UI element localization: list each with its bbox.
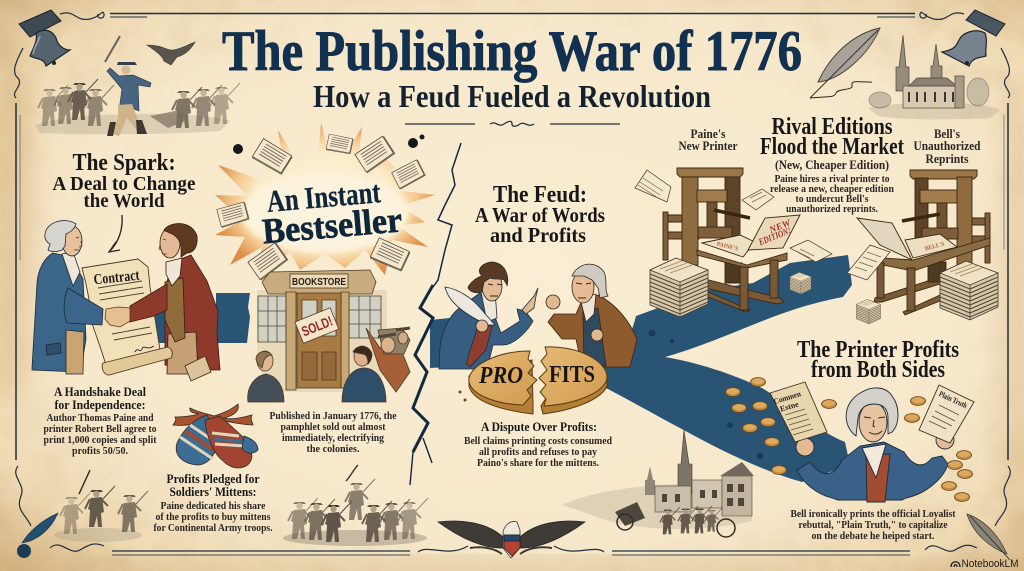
contract scroll: [82, 259, 172, 375]
text: bell ironically prints: rebuttal, "Plain Truth," to capitalize: [798, 519, 948, 531]
arm: paine sleeve: [130, 284, 167, 322]
illustration: paine's press: [650, 168, 811, 317]
text: published in january: Published in January 1776, the: [270, 410, 397, 422]
label: bell's unauthorized reprints: Unauthorized: [914, 139, 981, 153]
heading: the feud: and Profits: [490, 223, 586, 247]
text: published in january: immediately, electrifying: [282, 432, 385, 444]
heading: rival editions: (New, Cheaper Edition): [775, 157, 889, 172]
sketch: town top right: [868, 35, 1000, 119]
text: rival editions body: release a new, cheaper edition: [770, 184, 894, 195]
sketch: militia charge bottom: [283, 465, 428, 546]
text: rival editions body: unauthorized reprints.: [786, 204, 878, 215]
text: handshake deal: [44, 385, 157, 457]
text: published in january: [270, 410, 397, 455]
pamphlet: plain truth: Plain Truth: [938, 389, 969, 410]
icon: quill bottom right: [967, 514, 1010, 560]
heading: the spark: A Deal to Change: [52, 173, 196, 195]
text: handshake deal: printer Robert Bell agree to: [44, 424, 156, 435]
text: published in january: the colonies.: [306, 443, 360, 455]
loose sheets: [635, 170, 832, 262]
text: profits pledged: for Continental Army troops.: [154, 523, 273, 534]
text: profits pledged: Profits Pledged for: [166, 472, 260, 486]
heading: the feud: A War of Words: [475, 203, 605, 227]
icon: liberty bell left: [19, 10, 70, 66]
burst headline: Bestseller: [261, 199, 404, 251]
text: handshake deal: profits 50/50.: [72, 446, 128, 457]
text: profits pledged: of the profits to buy mittens: [156, 512, 270, 523]
figure: Bell shouting: [546, 264, 637, 367]
label: bell's unauthorized reprints: [914, 127, 981, 166]
illustration: paine and bell argue: [439, 262, 637, 369]
text: rival editions body: Paine hires a rival printer to: [774, 174, 890, 185]
title divider: [405, 121, 620, 126]
pamphlet: plain truth: [919, 385, 974, 443]
text: a dispute over profits: all profits and refuses to pay: [479, 447, 598, 458]
sketch: colonial town and cannon: [562, 430, 754, 537]
heading: the spark: The Spark:: [72, 150, 176, 176]
burst headline: [258, 173, 404, 251]
new edition frame: [748, 215, 800, 250]
icon: handshake: [105, 307, 130, 327]
right half: [541, 378, 607, 414]
heading: rival editions: Flood the Market: [760, 134, 904, 160]
icon: mittens: [173, 404, 258, 468]
coin word: FITS: [549, 362, 595, 388]
sketch: soldier bottom left: [54, 470, 148, 542]
customers: [248, 328, 410, 402]
bookstore sign: [290, 274, 348, 288]
heading: the printer profits: [797, 337, 959, 383]
text: bell ironically prints: [790, 508, 956, 542]
label: paine's new printer: New Printer: [678, 139, 738, 153]
label: paine's new printer: Paine's: [690, 127, 726, 141]
subtitle: How a Feud Fueled a Revolution: [313, 78, 711, 114]
text: bell ironically prints: Bell ironically prints the official Loyalist: [790, 508, 956, 520]
text: profits pledged: Soldiers' Mittens:: [170, 485, 256, 499]
heading: the feud: The Feud:: [493, 182, 587, 208]
heading: the spark: [52, 150, 196, 212]
loose printed page: [847, 245, 890, 280]
icon: eagle with shield: [438, 521, 585, 558]
icon: liberty bell right: [942, 10, 1005, 66]
sketch: quill top right: [810, 28, 880, 98]
figure: Robert Bell: [32, 221, 86, 374]
illustration: handshake with contract: [32, 221, 220, 381]
text: a dispute over profits: A Dispute Over Profits:: [481, 420, 597, 434]
arrow: spark to handshake: [109, 215, 122, 252]
contract scroll: Contract: [93, 268, 140, 288]
crack dividing the page: [410, 143, 461, 485]
ink river: right fork: [600, 255, 852, 482]
label: bell's unauthorized reprints: Bell's: [934, 127, 960, 141]
illustration: bell holding both pamphlets: [770, 382, 974, 502]
figure: Paine with quill: [439, 262, 538, 369]
text: handshake deal: Author Thomas Paine and: [46, 413, 154, 424]
text: handshake deal: print 1,000 copies and split: [44, 435, 157, 446]
icon: quill and inkwell bottom left: [17, 513, 58, 558]
book in hand: [185, 356, 211, 381]
text: rival editions body: [770, 174, 894, 215]
burst headline: An Instant: [265, 174, 382, 219]
pamphlet: common sense: [770, 382, 827, 442]
watermark: NotebookLM: NotebookLM: [962, 558, 1018, 570]
sketch: battle scene top left: [35, 36, 240, 136]
text: handshake deal: for Independence:: [54, 398, 146, 412]
left half: [469, 360, 533, 414]
text: a dispute over profits: [464, 420, 612, 469]
pamphlet: common sense: Estne: [779, 399, 800, 414]
arm: bell sleeve: [64, 288, 103, 325]
burst: an instant bestseller: [215, 123, 435, 281]
heading: the spark: the World: [84, 190, 164, 212]
text: a dispute over profits: Paino's share for the mittens.: [477, 458, 599, 469]
new edition frame: NEW: [767, 218, 793, 236]
bookstore sign: BOOKSTORE: [292, 277, 346, 288]
illustration: bell's press: BELL'S: [924, 241, 946, 253]
illustration: broken profits coin: [458, 347, 607, 414]
label: bell's unauthorized reprints: Reprints: [926, 152, 969, 166]
coins: [726, 378, 972, 502]
pamphlet: common sense: Commen: [773, 389, 802, 406]
icon: eagle: [147, 42, 195, 65]
ink river: behind feud: [430, 318, 470, 368]
pamphlets around burst: [216, 133, 426, 281]
hand holding left pamphlet: [796, 438, 814, 456]
heading: rival editions: Rival Editions: [772, 114, 892, 140]
coin word: PRO: [478, 363, 523, 389]
figure: Thomas Paine: [159, 224, 220, 374]
text: published in january: pamphlet sold out almost: [280, 421, 386, 433]
sold sign: [295, 308, 339, 343]
text: bell ironically prints: on the debate he heiped start.: [812, 530, 935, 542]
hand holding right pamphlet: [936, 431, 954, 449]
title: The Publishing War of 1776: [222, 20, 802, 83]
text: profits pledged: [154, 472, 273, 534]
text: profits pledged: Paine dedicated his share: [160, 501, 266, 512]
heading: the printer profits: The Printer Profits: [797, 337, 959, 363]
door: [297, 293, 341, 388]
heading: the feud: [475, 182, 605, 247]
text: a dispute over profits: Bell claims printing costs consumed: [464, 436, 612, 447]
ink river: left: [155, 293, 250, 343]
sold sign: SOLD!: [299, 313, 335, 339]
new edition frame: EDITION!: [757, 226, 793, 248]
illustration: bookstore: [248, 270, 410, 402]
label: paine's new printer: [678, 127, 738, 153]
illustration: paine's press: PAINE'S: [716, 241, 739, 253]
bell coat: [797, 442, 948, 500]
text: rival editions body: to undercut Bell's: [796, 194, 868, 205]
heading: rival editions: [760, 114, 904, 172]
heading: the printer profits: from Both Sides: [811, 357, 945, 383]
text: handshake deal: A Handshake Deal: [54, 385, 146, 399]
illustration: bell's press: [847, 170, 998, 324]
figure: officer with sword: [105, 36, 151, 136]
